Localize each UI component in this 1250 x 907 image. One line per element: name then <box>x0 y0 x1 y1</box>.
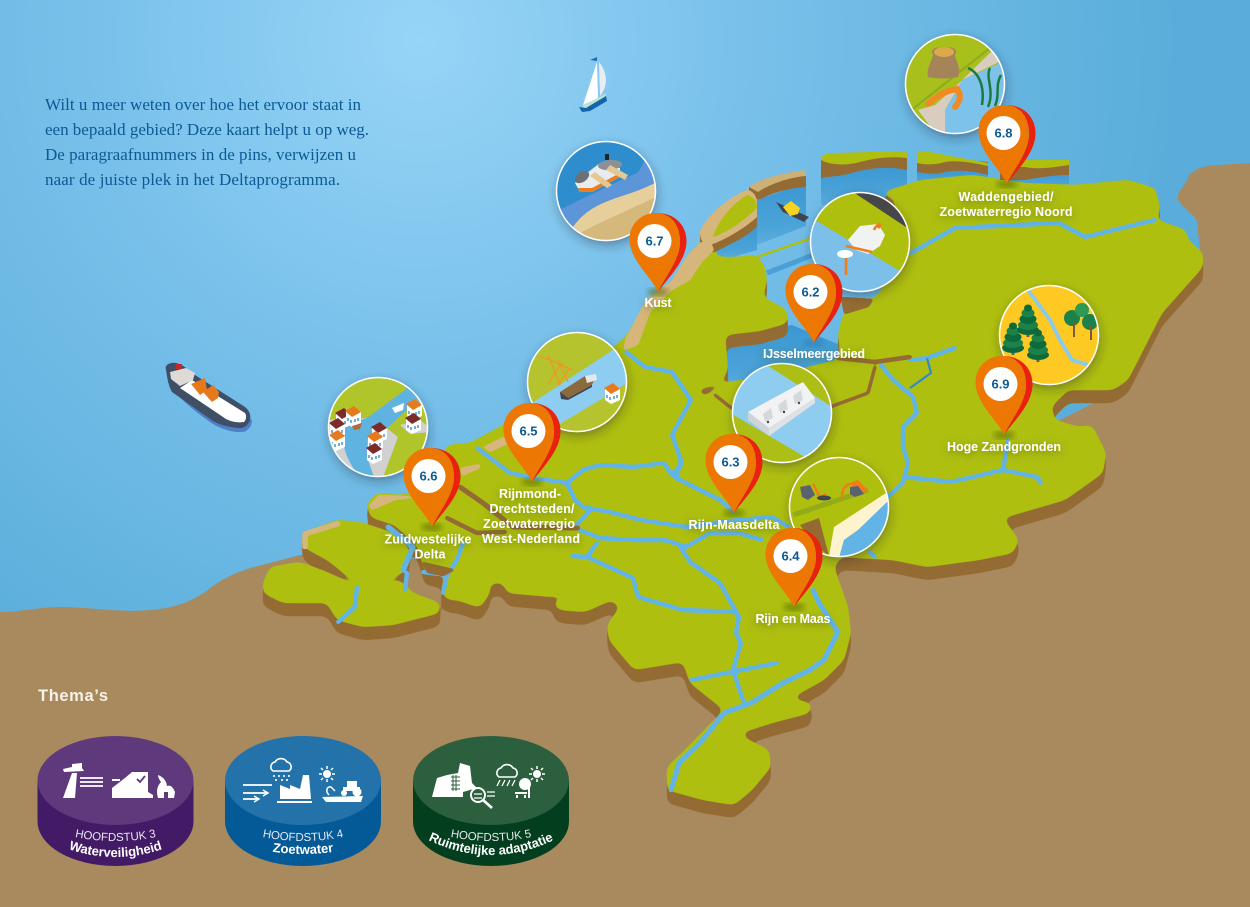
rivers <box>338 220 1155 790</box>
scene circle: Rijn en Maas <box>784 452 894 562</box>
intro text <box>45 95 369 189</box>
pin 6.5 <box>503 403 561 486</box>
theme disc: Zoetwater <box>225 736 381 866</box>
icon: safety <box>63 763 175 798</box>
icon: spatial adaptation <box>432 763 545 808</box>
text: Ruimtelijke adaptatie: Ruimtelijke adaptatie <box>429 832 552 857</box>
label: Zuidwestelijke Delta: Zuidwestelijke <box>384 532 472 546</box>
intro text: naar de juiste plek in het Deltaprogramma. <box>45 170 340 189</box>
theme disc: Ruimtelijke adaptatie <box>413 736 569 866</box>
text: Hoofdstuk 4: HOOFDSTUK 4 <box>263 829 343 841</box>
label: Rijnmond-Drechtsteden: Drechtsteden/ <box>490 502 575 516</box>
pin 6.6 <box>403 448 461 531</box>
scene circle: Rijnmond <box>522 328 635 438</box>
scene circle: Zuidwestelijke Delta <box>323 373 433 483</box>
label: Zuidwestelijke Delta: Delta <box>414 548 447 562</box>
label: Rijnmond-Drechtsteden <box>482 487 580 546</box>
pin 6.8 <box>978 105 1036 188</box>
Afsluitdijk <box>757 238 813 273</box>
side channel <box>910 358 931 388</box>
scene circle: Rijn-Maasdelta <box>727 359 837 470</box>
text: Hoofdstuk 3: HOOFDSTUK 3 <box>76 829 156 841</box>
pin 6.3 <box>705 434 763 517</box>
label: Rijn en Maas: Rijn en Maas <box>756 612 831 626</box>
label: Rijnmond-Drechtsteden: Zoetwaterregio <box>483 517 575 531</box>
text: Hoofdstuk 5: HOOFDSTUK 5 <box>451 829 531 841</box>
icon: cargo ship <box>166 363 252 432</box>
scene circle: Hoge Zandgronden <box>995 280 1105 390</box>
label: Rijnmond-Drechtsteden: West-Nederland <box>482 532 580 546</box>
label: Waddengebied: Zoetwaterregio Noord <box>940 205 1072 219</box>
pin 6.6: 6.6 <box>419 468 438 484</box>
scene circle: Kust <box>550 135 665 250</box>
label: Rijn-Maasdelta: Rijn-Maasdelta <box>688 518 781 532</box>
heading: Thema's: Thema’s <box>38 687 108 705</box>
label: Rijnmond-Drechtsteden: Rijnmond- <box>499 487 561 501</box>
intro text: Wilt u meer weten over hoe het ervoor staat in <box>45 95 362 114</box>
text: Waterveiligheid: Waterveiligheid <box>70 840 162 859</box>
pin 6.9 <box>975 356 1033 439</box>
beaches <box>305 242 714 549</box>
intro text: een bepaald gebied? Deze kaart helpt u op weg. <box>45 120 369 139</box>
deep water patches <box>705 165 1069 390</box>
label: IJsselmeergebied: IJsselmeergebied <box>763 347 865 361</box>
scene circle: IJsselmeergebied <box>804 190 918 301</box>
icon: sailboat <box>579 57 607 112</box>
icon: fresh water <box>243 759 363 802</box>
pin 6.7: 6.7 <box>645 234 664 248</box>
scene circle: Waddengebied <box>900 30 1010 140</box>
pin 6.8: 6.8 <box>994 126 1013 140</box>
tugboat near Vlieland <box>776 201 809 222</box>
label: Waddengebied <box>940 190 1072 219</box>
pin 6.4 <box>765 528 823 611</box>
brown inlets and dike edges <box>423 298 910 575</box>
pin 6.9: 6.9 <box>991 376 1010 392</box>
intro text: De paragraafnummers in de pins, verwijzen u <box>45 145 356 164</box>
pin 6.5: 6.5 <box>519 424 538 438</box>
pin 6.7 <box>629 213 687 296</box>
label: Waddengebied: Waddengebied/ <box>958 190 1054 204</box>
region labels <box>384 190 1072 626</box>
map side extrusion <box>263 180 1203 818</box>
label: Hoge Zandgronden: Hoge Zandgronden <box>947 440 1061 454</box>
map of the Netherlands: land top <box>263 175 1203 805</box>
label: Zuidwestelijke Delta <box>384 532 472 562</box>
pin 6.2: 6.2 <box>801 284 820 300</box>
label: Kust: Kust <box>644 296 672 310</box>
pin 6.2 <box>785 264 843 347</box>
Wadden islands <box>700 151 1069 252</box>
pin 6.4: 6.4 <box>781 548 800 564</box>
theme disc: Waterveiligheid <box>38 736 194 866</box>
pin 6.3: 6.3 <box>721 454 740 470</box>
text: Zoetwater: Zoetwater <box>272 843 333 854</box>
